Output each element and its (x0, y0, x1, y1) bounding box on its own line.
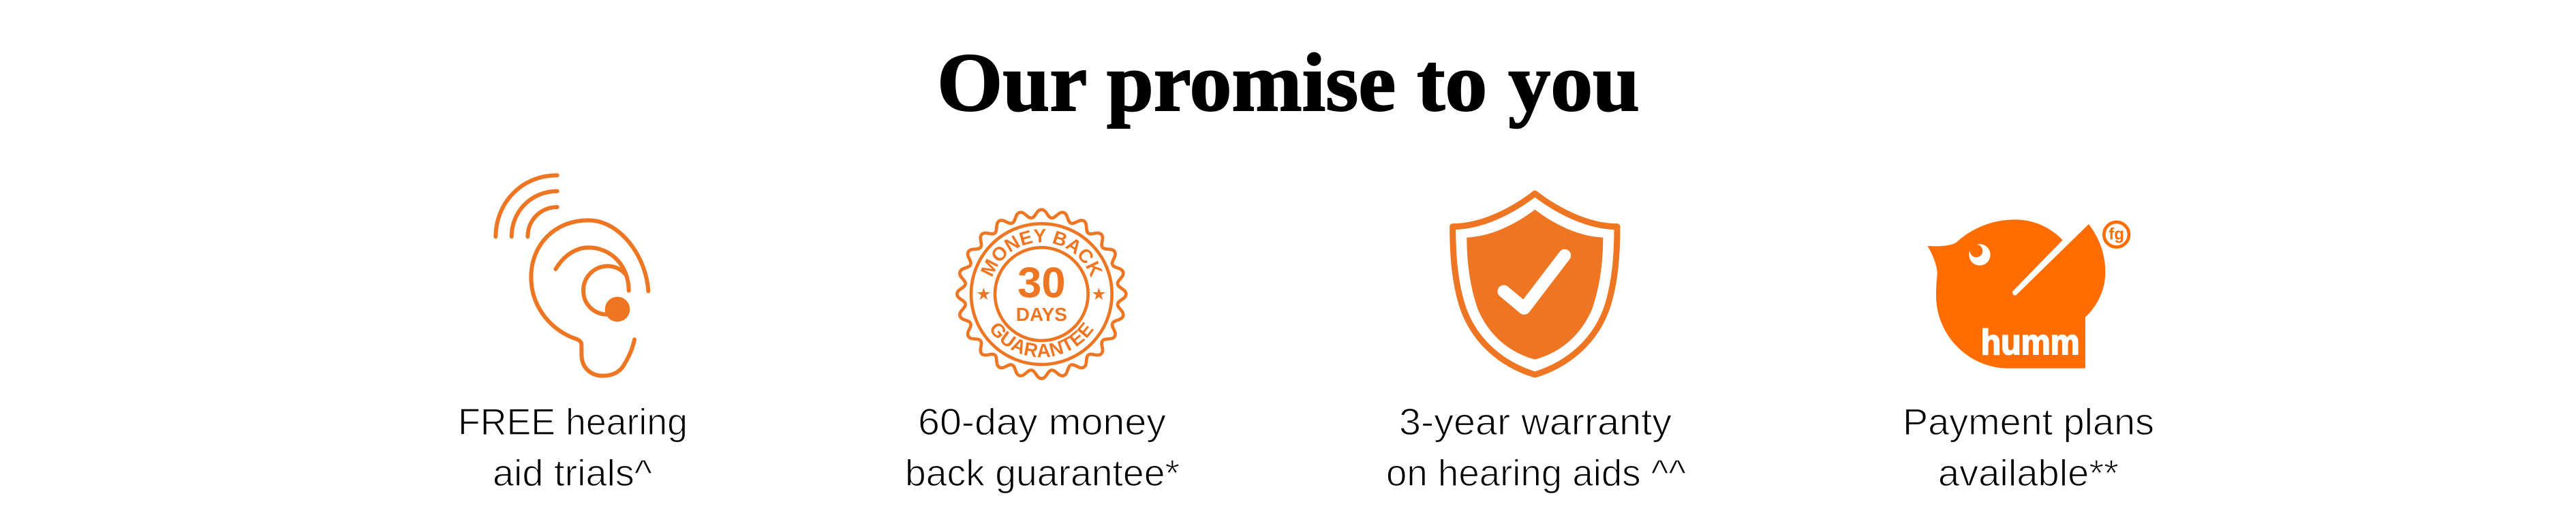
title: Our promise to you (937, 37, 1640, 129)
icon: ear with sound waves (495, 175, 648, 376)
label: 3-year warranty on hearing aids (1386, 401, 1686, 494)
icon: money back badge: DAYS (1016, 304, 1067, 325)
label: free hearing aid trials: aid trials^ (493, 452, 652, 494)
label: 60-day money back guarantee (905, 401, 1180, 494)
label: payment plans available (1903, 401, 2154, 494)
icon: money back badge: MONEY BACK (981, 229, 1103, 278)
label: 3-year warranty on hearing aids: 3-year warranty (1399, 401, 1672, 443)
icon: money back badge: GUARANTEE (991, 322, 1094, 358)
icon: humm bird logo (1927, 219, 2129, 369)
icon: money back badge: 30 (1017, 260, 1066, 307)
label: 60-day money back guarantee: 60-day money (918, 401, 1167, 443)
icon: money back badge: ★ (1092, 286, 1105, 302)
label: 3-year warranty on hearing aids: on hearing aids ^^ (1386, 452, 1686, 494)
label: payment plans available: Payment plans (1903, 401, 2154, 443)
label: payment plans available: available** (1938, 452, 2119, 494)
icon: humm bird logo: fg (2109, 225, 2124, 244)
label: 60-day money back guarantee: back guarantee* (905, 452, 1180, 494)
icon: humm bird logo: humm (1981, 323, 2080, 362)
label: free hearing aid trials (458, 401, 688, 494)
icon: money back badge (955, 208, 1128, 380)
icon: money back badge: ★ (977, 286, 990, 302)
label: free hearing aid trials: FREE hearing (458, 401, 688, 443)
icon: shield with check mark (1453, 193, 1617, 375)
